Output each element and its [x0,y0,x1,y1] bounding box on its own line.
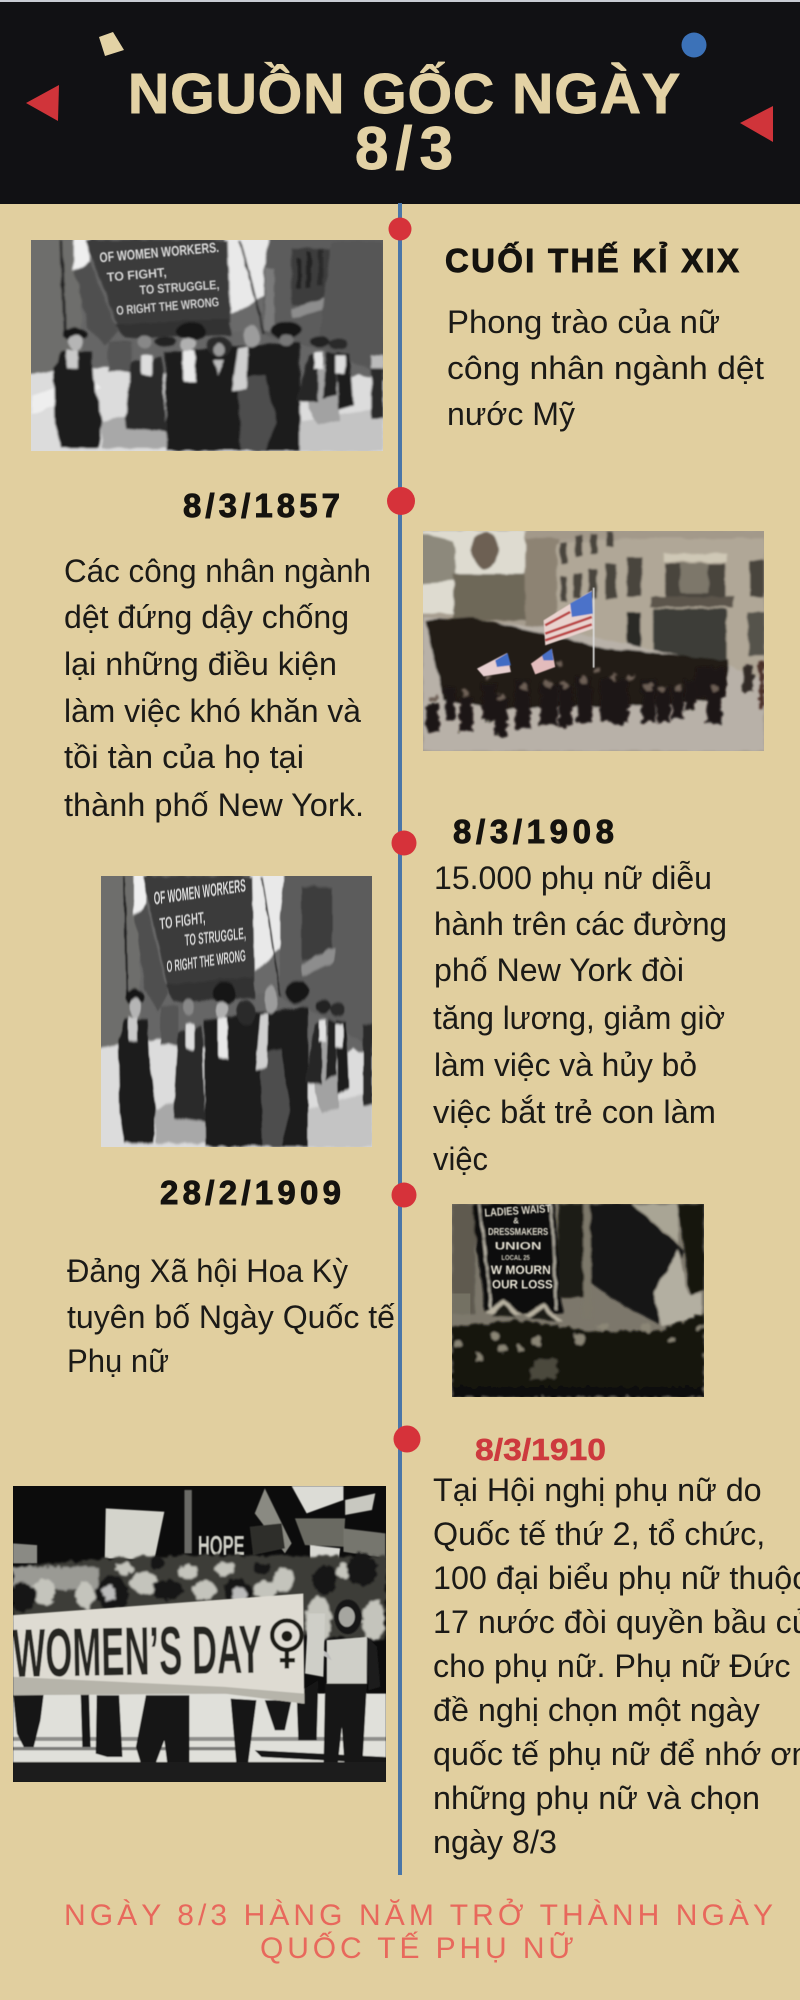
photo: dressmakers union banner: OUR LOSS [492,1277,553,1291]
text: 1857 event: làm việc khó khăn và [64,693,361,729]
text: phong trào: Phong trào của nữ [447,304,720,340]
text: 1909 event: Đảng Xã hội Hoa Kỳ [67,1253,348,1289]
photo: dressmakers union banner: W MOURN [491,1263,551,1277]
heading: 28/2/1909: 28/2/1909 [160,1174,341,1211]
timeline line [398,203,402,1875]
photo: women's day march: HOPE [198,1530,245,1561]
footer conclusion: QUỐC TẾ PHỤ NỮ [260,1931,574,1965]
text: 1857 event: thành phố New York. [64,787,364,823]
photo: dressmakers union banner: LADIES WAIST [484,1203,552,1220]
text: 1910 event: ngày 8/3 [433,1824,557,1860]
photo: women workers march: TO STRUGGLE, [139,278,220,297]
text: phong trào: nước Mỹ [447,396,575,432]
photo: women workers march: O RIGHT THE WRONG [116,295,220,318]
text: 1910 event: Tại Hội nghị phụ nữ do [433,1472,762,1508]
photo: dressmakers union banner: DRESSMAKERS [488,1227,548,1238]
photo: women workers march, second crop: OF WOMEN WORKERS [153,877,246,910]
text: 1910 event: những phụ nữ và chọn [433,1780,760,1816]
text: 1910 event: 100 đại biểu phụ nữ thuộc [433,1560,800,1596]
photo: women workers march, second crop: TO STRUGGLE, [184,924,246,949]
text: 1857 event [64,553,371,823]
title: 8/3 [355,115,453,182]
icon: cream diamond [99,32,124,56]
timeline dot 4 [392,1182,416,1208]
text: phong trào: công nhân ngành dệt [447,350,764,386]
text: 1857 event: tồi tàn của họ tại [64,739,304,775]
text: 1909 event [67,1253,395,1379]
text: 1910 event: Quốc tế thứ 2, tổ chức, [433,1516,765,1552]
text: 1910 event: quốc tế phụ nữ để nhớ ơn [433,1736,800,1772]
crowd figures [426,704,439,732]
photo: women workers march: OF WOMEN WORKERS. [99,239,220,265]
text: 1910 event: đề nghị chọn một ngày [433,1692,761,1728]
icon: blue circle [682,32,706,58]
footer conclusion: NGÀY 8/3 HÀNG NĂM TRỞ THÀNH NGÀY [64,1898,773,1932]
text: 1908 event: việc bắt trẻ con làm [433,1094,716,1130]
text: 1909 event: tuyên bố Ngày Quốc tế [67,1299,395,1335]
text: 1910 event [433,1472,800,1860]
title: NGUỒN GỐC NGÀY [128,61,680,126]
text: 1908 event: hành trên các đường [434,906,727,942]
photo: women workers march: TO FIGHT, [106,265,167,285]
text: 1908 event: tăng lương, giảm giờ [433,1000,725,1036]
text: 1857 event: Các công nhân ngành [64,553,371,589]
timeline dot 2 [387,487,415,515]
photo: women workers march [31,239,383,451]
text: phong trào [447,304,764,432]
timeline dot 3 [392,830,416,856]
timeline dot 5 [394,1426,420,1452]
heading: 8/3/1910: 8/3/1910 [475,1432,606,1467]
text: 1908 event: 15.000 phụ nữ diễu [434,860,712,896]
heading: 8/3/1908: 8/3/1908 [453,813,614,850]
text: 1857 event: lại những điều kiện [64,646,337,682]
text: 1910 event: cho phụ nữ. Phụ nữ Đức [433,1648,791,1684]
text: 1908 event [433,860,727,1177]
photo: dressmakers union banner [452,1203,704,1397]
photo: dressmakers union banner: & [513,1216,519,1225]
text: 1909 event: Phụ nữ [67,1343,169,1379]
photo: women workers march, second crop [101,876,372,1147]
timeline dot 1 [388,218,412,240]
icon: left red triangle [26,85,59,121]
photo: women workers march, second crop: O RIGHT THE WRONG [166,946,246,976]
title [128,61,680,182]
photo: women's day march [12,1486,386,1782]
text: 1908 event: việc [433,1141,488,1177]
photo: dressmakers union banner: LOCAL 25 [501,1253,530,1262]
footer conclusion [64,1898,773,1965]
heading: 8/3/1857: 8/3/1857 [183,487,340,524]
header band [0,0,800,204]
heading: cuối thế kỉ XIX: CUỐI THẾ KỈ XIX [445,241,739,279]
text: 1857 event: dệt đứng dậy chống [64,599,349,635]
text: 1908 event: phố New York đòi [434,952,684,988]
photo: dressmakers union banner: UNION [495,1240,541,1252]
photo: women workers march, second crop: TO FIGHT, [159,908,206,933]
text: 1908 event: làm việc và hủy bỏ [434,1047,697,1083]
icon: right red triangle [740,106,773,142]
photo: march with american flags [423,531,764,751]
